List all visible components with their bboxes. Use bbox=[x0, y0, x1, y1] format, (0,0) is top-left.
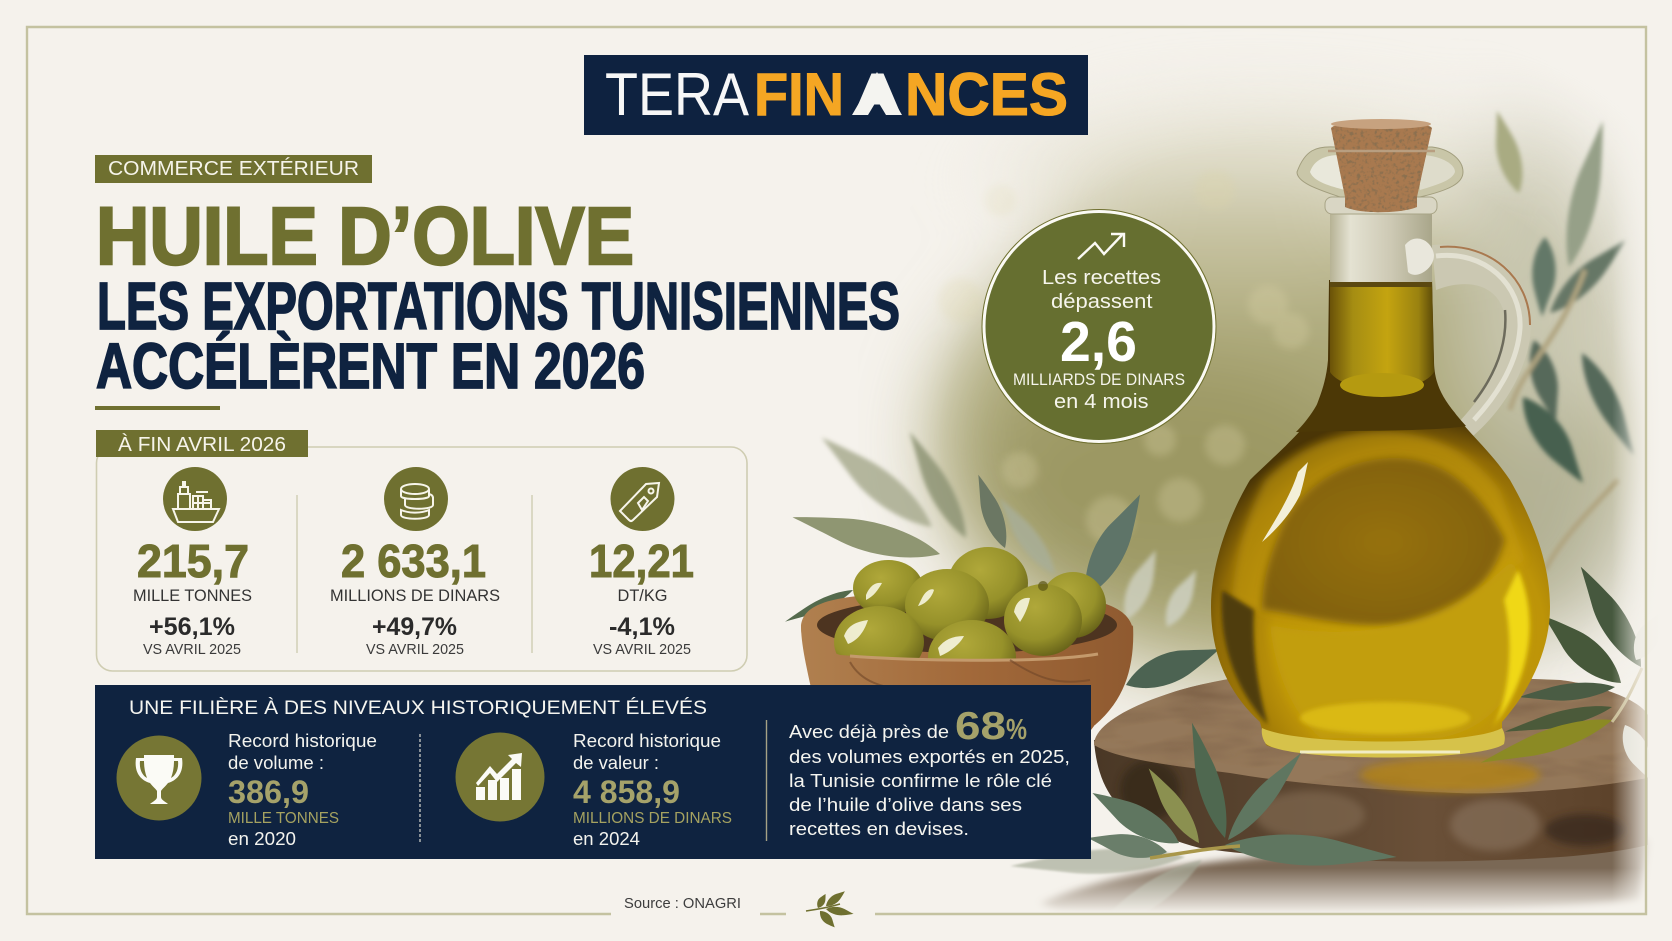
figure: value: MILLIONS DE DINARS bbox=[330, 586, 500, 605]
badge: revenue callout: Les recettes bbox=[1042, 266, 1161, 289]
logo: FIN bbox=[754, 61, 844, 128]
callout: 68% of 2025 export volumes: des volumes exportés en 2025, bbox=[789, 746, 1070, 767]
record: value: Record historique bbox=[573, 731, 721, 751]
bowl front rim bbox=[801, 625, 1133, 730]
badge: revenue callout: dépassent bbox=[1051, 290, 1153, 313]
photo edge fades bbox=[1000, 60, 1672, 941]
title: ACCÉLÈRENT EN 2026 bbox=[96, 330, 645, 402]
title: LES EXPORTATIONS TUNISIENNES bbox=[97, 269, 900, 344]
badge: revenue callout: en 4 mois bbox=[1054, 390, 1148, 413]
badge: revenue callout bbox=[982, 210, 1216, 444]
source: Source : ONAGRI bbox=[624, 896, 741, 912]
blurred grove background bbox=[930, 80, 1650, 680]
leaves behind the bowl bbox=[783, 426, 1225, 699]
foreground leaves bbox=[1010, 720, 1398, 941]
figure: value: 2 633,1 bbox=[341, 535, 486, 587]
record: volume: en 2020 bbox=[228, 829, 296, 849]
icon: price tag bbox=[610, 467, 674, 531]
record: volume: de volume : bbox=[228, 753, 324, 773]
icon: cargo ship bbox=[163, 467, 227, 531]
figure: volume: 215,7 bbox=[137, 535, 249, 587]
record: volume: MILLE TONNES bbox=[228, 810, 339, 827]
icon: rising bar chart bbox=[456, 732, 544, 822]
icon: trophy bbox=[116, 736, 202, 820]
figure: volume: VS AVRIL 2025 bbox=[143, 642, 241, 658]
record: value: en 2024 bbox=[573, 829, 640, 849]
record: volume: Record historique bbox=[228, 731, 377, 751]
record: value: MILLIONS DE DINARS bbox=[573, 810, 732, 827]
record: value bbox=[573, 731, 732, 849]
bottle handle bbox=[1432, 245, 1531, 440]
category tag: COMMERCE EXTÉRIEUR bbox=[108, 157, 359, 180]
figure: volume: +56,1% bbox=[149, 613, 235, 641]
category tag bbox=[95, 155, 372, 183]
callout: 68% of 2025 export volumes: % bbox=[1006, 714, 1027, 746]
cork stopper bbox=[1328, 119, 1435, 212]
olives bbox=[834, 547, 1106, 694]
figure: value: +49,7% bbox=[372, 613, 457, 641]
icon: trend arrow bbox=[1078, 234, 1124, 259]
figure: volume: MILLE TONNES bbox=[133, 586, 252, 605]
bottle neck glass bbox=[1297, 147, 1463, 282]
right leaves bbox=[1477, 560, 1671, 784]
icon: olive sprig bbox=[806, 888, 854, 930]
record: volume bbox=[228, 731, 377, 849]
title: HUILE D’OLIVE bbox=[96, 191, 634, 282]
figure: price bbox=[589, 535, 694, 658]
logo bbox=[584, 55, 1088, 135]
panel heading: UNE FILIÈRE À DES NIVEAUX HISTORIQUEMENT ÉLEVÉS bbox=[129, 696, 707, 719]
figure: price: -4,1% bbox=[609, 613, 675, 641]
panel: key figures at end of April 2026 bbox=[96, 430, 747, 671]
wooden bowl with olives bbox=[801, 547, 1133, 730]
section tag bbox=[96, 430, 308, 457]
figure: price: VS AVRIL 2025 bbox=[593, 642, 691, 658]
record: value: de valeur : bbox=[573, 753, 659, 773]
logo: TERA bbox=[605, 61, 749, 128]
logo: A bbox=[852, 61, 903, 128]
icon: coins bbox=[384, 467, 448, 531]
figure: value bbox=[330, 535, 500, 658]
panel: historic records bbox=[95, 685, 1091, 859]
photo: olive oil bottle, olives and leaves bbox=[783, 60, 1672, 941]
callout: 68% of 2025 export volumes: de l’huile d’olive dans ses bbox=[789, 794, 1022, 815]
badge: revenue callout: MILLIARDS DE DINARS bbox=[1013, 370, 1185, 389]
bottle body with oil bbox=[1211, 280, 1550, 758]
section tag: À FIN AVRIL 2026 bbox=[118, 433, 286, 456]
callout: 68% of 2025 export volumes bbox=[789, 705, 1070, 839]
callout: 68% of 2025 export volumes: 68 bbox=[955, 705, 1006, 748]
figure: price: 12,21 bbox=[589, 535, 694, 587]
callout: 68% of 2025 export volumes: la Tunisie confirme le rôle clé bbox=[789, 770, 1052, 791]
title bbox=[96, 191, 900, 402]
figure: price: DT/KG bbox=[618, 586, 668, 605]
badge: revenue callout: 2,6 bbox=[1060, 310, 1137, 374]
figure: value: VS AVRIL 2025 bbox=[366, 642, 464, 658]
title underline bbox=[95, 406, 220, 410]
blurred upper right branch bbox=[1486, 108, 1644, 570]
figure: volume bbox=[133, 535, 252, 658]
record: volume: 386,9 bbox=[228, 774, 309, 810]
logo: NCES bbox=[905, 61, 1068, 128]
record: value: 4 858,9 bbox=[573, 774, 680, 810]
wooden board bbox=[1040, 671, 1650, 916]
callout: 68% of 2025 export volumes: Avec déjà près de bbox=[789, 721, 949, 742]
callout: 68% of 2025 export volumes: recettes en devises. bbox=[789, 818, 969, 839]
